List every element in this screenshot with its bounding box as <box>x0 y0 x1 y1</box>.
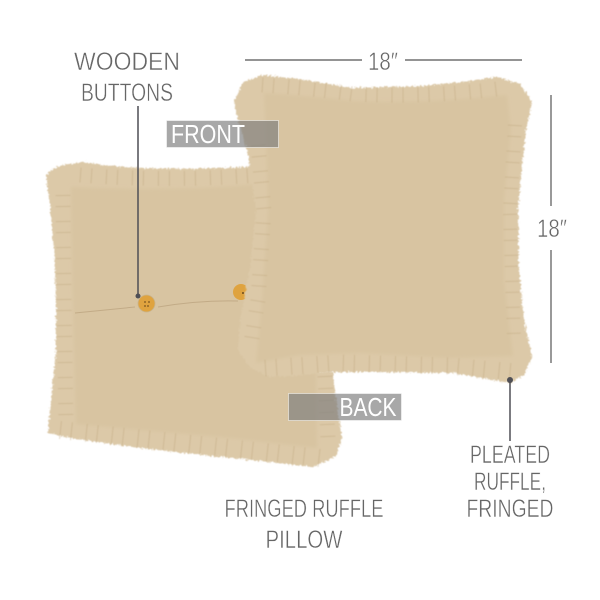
dimension: height 18 inches: 18″ <box>537 215 567 243</box>
callout: pleated ruffle, fringed: FRINGED <box>466 495 554 523</box>
callout: wooden buttons: BUTTONS <box>81 79 173 107</box>
back pillow pleats <box>60 175 328 458</box>
label: BACK <box>288 392 402 422</box>
callout: wooden buttons: WOODEN <box>74 48 180 76</box>
front pillow pleats <box>250 85 515 372</box>
callout: pleated ruffle, fringed <box>466 377 554 523</box>
callout: pleated ruffle, fringed: PLEATED <box>470 441 550 469</box>
product name: PILLOW <box>266 526 343 554</box>
callout: wooden buttons <box>74 48 180 298</box>
product name: FRINGED RUFFLE <box>224 495 384 523</box>
product name <box>224 495 384 554</box>
icon: wooden button 1 <box>138 295 155 312</box>
front pillow body <box>256 93 513 363</box>
back placket seam <box>75 301 238 313</box>
back pillow <box>46 162 342 467</box>
front pillow ruffle <box>234 75 532 383</box>
front pillow <box>234 75 532 383</box>
dimension: width 18 inches: 18″ <box>368 48 398 76</box>
back pillow body <box>71 184 317 448</box>
callout: pleated ruffle, fringed: RUFFLE, <box>474 468 546 496</box>
icon: wooden button 2 <box>233 284 249 300</box>
label: BACK: BACK <box>340 392 397 422</box>
label: FRONT: FRONT <box>171 119 245 149</box>
back pillow ruffle <box>46 162 342 467</box>
